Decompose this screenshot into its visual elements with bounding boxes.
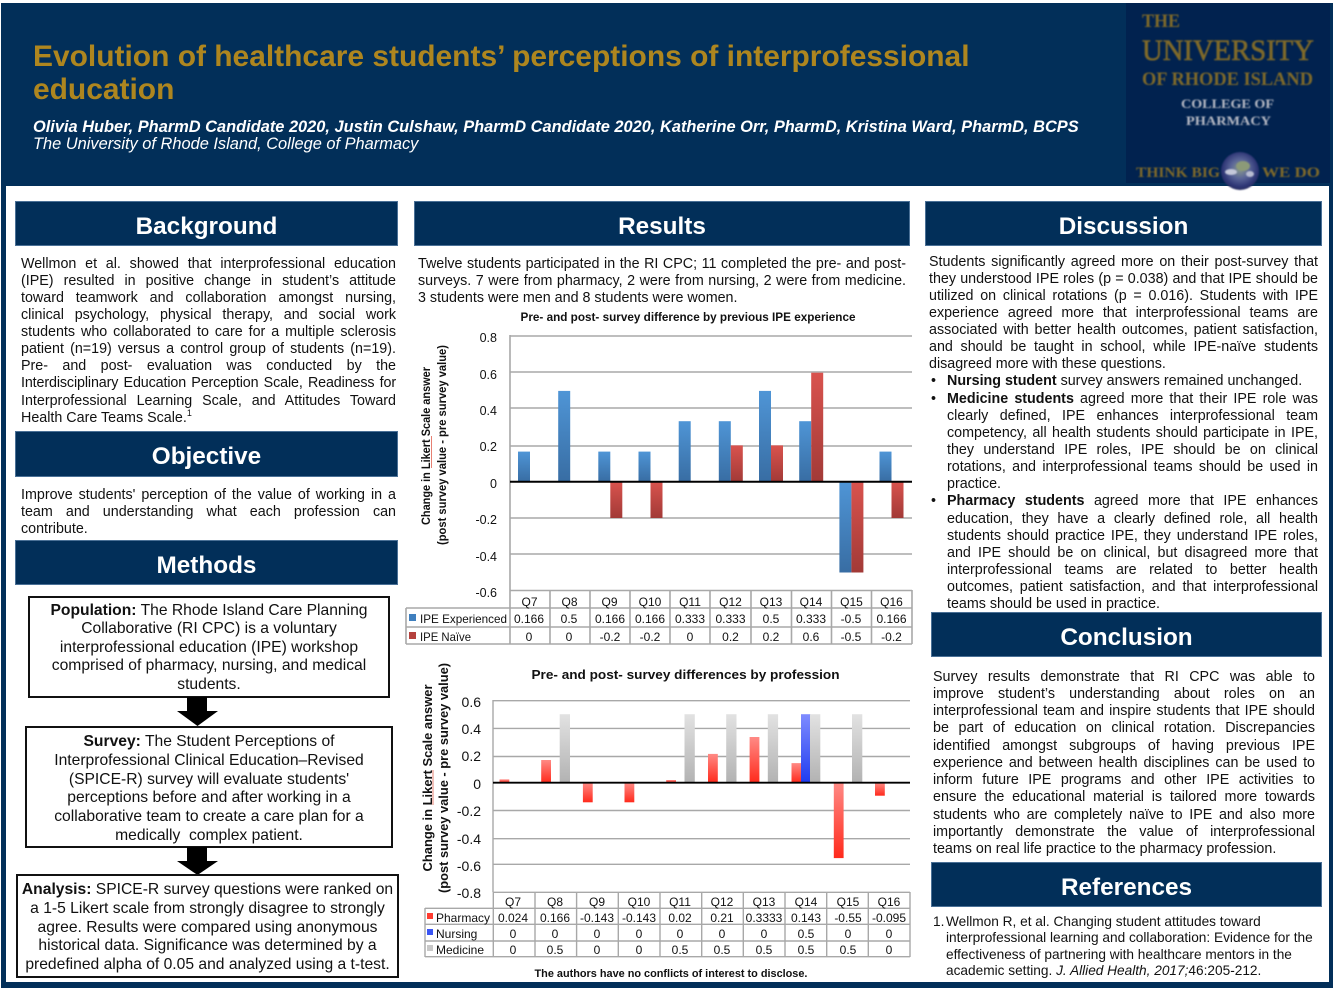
data table: Medicine row: 0.5 <box>714 943 731 957</box>
y axis labels: 0.4 <box>462 721 481 737</box>
university logo: THINK BIG <box>1136 165 1220 181</box>
data table: Nursing row: 0 <box>886 927 893 941</box>
data table: question labels: Q14 <box>800 595 823 609</box>
data table: Pharmacy row: 0.3333 <box>746 911 783 925</box>
text: discussion: • <box>931 493 936 509</box>
chart title: Pre- and post- survey differences by profession <box>532 668 840 682</box>
data table: question labels: Q12 <box>719 595 742 609</box>
data table: IPE Experienced row: 0.5 <box>763 612 780 626</box>
data table: IPE Naive row: 0 <box>566 630 573 644</box>
y axis labels: 0 <box>490 477 497 491</box>
method box: survey: medically complex patient. <box>115 827 303 844</box>
method box: analysis: predefined alpha of 0.05 and analyzed using a t-test. <box>25 956 390 973</box>
text: conclusion: interprofessional team and inspire students that IPE should <box>933 703 1315 719</box>
method box: population: students. <box>177 676 241 693</box>
data table: IPE Naive row: -0.5 <box>841 630 862 644</box>
text: references: interprofessional learning and collaboration: Evidence for the <box>946 930 1313 945</box>
data table: question labels <box>521 595 903 609</box>
data table: IPE Experienced row <box>409 612 907 626</box>
text: objective: team and understanding what each profession can <box>21 504 396 520</box>
y axis labels: -0.8 <box>457 885 481 901</box>
data table: IPE Experienced row: 0.166 <box>595 612 625 626</box>
bars: IPE Naive <box>610 373 904 572</box>
data table: Medicine row: 0.5 <box>756 943 773 957</box>
data table: IPE Naive row: -0.2 <box>640 630 661 644</box>
y axis labels: -0.6 <box>475 586 497 600</box>
method box: population: interprofessional education (IPE) workshop <box>60 639 358 656</box>
data table: IPE Naive row: 0 <box>526 630 533 644</box>
data table: Nursing row: Nursing <box>436 927 477 941</box>
disclosure note: The authors have no conflicts of interest to disclose. <box>535 968 807 980</box>
text: conclusion: improve student’s understanding about roles on an <box>933 686 1315 702</box>
data table: IPE Experienced row: -0.5 <box>841 612 862 626</box>
y axis labels: -0.2 <box>475 513 497 527</box>
y axis labels: 0.6 <box>480 368 497 382</box>
y axis labels: 0.2 <box>480 440 497 454</box>
method box: population: Collaborative (RI CPC) is a voluntary <box>81 620 337 637</box>
text: references: 1. <box>933 914 944 929</box>
data table: IPE Experienced row: 0.333 <box>715 612 746 626</box>
data table: Pharmacy row: 0.024 <box>498 911 528 925</box>
data table: Pharmacy row: -0.143 <box>622 911 656 925</box>
method box: analysis: historical data. Significance was determined by a <box>38 937 377 954</box>
y axis labels: 0.4 <box>480 404 497 418</box>
y axis labels: 0 <box>473 776 481 792</box>
data table: IPE Experienced row: 0.333 <box>796 612 826 626</box>
data table: question labels: Q12 <box>711 895 734 909</box>
data table: question labels: Q13 <box>753 895 776 909</box>
heading: Discussion: Discussion <box>1059 213 1188 240</box>
bars: Nursing <box>801 714 810 783</box>
university logo: PHARMACY <box>1186 113 1272 128</box>
heading: Background: Background <box>136 213 277 240</box>
data table: IPE Naive row: 0.6 <box>803 630 820 644</box>
text: background: students who collaborated to care for a multiple sclerosis <box>21 324 396 340</box>
y axis labels: 0.8 <box>480 331 497 345</box>
heading: Methods: Methods <box>157 552 256 579</box>
data table: IPE Naive row: 0.2 <box>722 630 739 644</box>
text: conclusion: identified amongst subgroups of having previous IPE <box>933 738 1315 754</box>
data table: Medicine row: 0.5 <box>798 943 815 957</box>
data table: Nursing row: 0.5 <box>798 927 815 941</box>
authors and affiliation <box>33 118 1079 153</box>
text: conclusion: students who are completely naïve to IPE and also more <box>933 806 1315 822</box>
data table: IPE Naive row: IPE Naïve <box>420 630 471 644</box>
data table: Nursing row: 0 <box>552 927 559 941</box>
data table: Pharmacy row <box>427 911 906 925</box>
text: conclusion: teams on real life practice to the pharmacy profession. <box>933 841 1276 857</box>
method box: analysis <box>16 874 399 978</box>
text: background: clinical psychology, physical therapy, and social work <box>21 307 396 323</box>
y axis labels <box>475 331 497 600</box>
data table: question labels: Q7 <box>521 595 538 609</box>
text: discussion: disagreed more with these questions. <box>929 356 1166 372</box>
data table: Nursing row: 0 <box>845 927 852 941</box>
authors and affiliation: The University of Rhode Island, College of Pharmacy <box>33 135 418 153</box>
text: results: 3 students were men and 8 students were women. <box>418 290 737 306</box>
data table: question labels: Q8 <box>561 595 578 609</box>
y axis labels <box>457 694 481 901</box>
heading: Objective <box>15 431 398 477</box>
heading: Conclusion: Conclusion <box>1060 624 1193 651</box>
text: discussion: they understood IPE roles (p = 0.038) and that IPE should be <box>929 271 1318 287</box>
text: discussion: education, they have a clearly defined role, all health <box>947 511 1318 527</box>
text: discussion: competency, all health students should participate in IPE, <box>947 425 1318 441</box>
university logo: UNIVERSITY <box>1142 34 1314 67</box>
y axis title: (post survey value - pre survey value) <box>436 663 451 893</box>
text: discussion: they understand IPE roles, IPE should be on clinical <box>947 442 1318 458</box>
heading: References: References <box>1061 874 1192 901</box>
data table: Pharmacy row: -0.095 <box>872 911 906 925</box>
data table: Pharmacy row: 0.166 <box>540 911 570 925</box>
y axis labels: -0.4 <box>475 550 497 564</box>
data table: IPE Experienced row: 0.166 <box>514 612 544 626</box>
data table: Nursing row: 0 <box>677 927 684 941</box>
y axis labels: -0.6 <box>457 858 481 874</box>
text: discussion: and IPE should be on clinical, but disagreed more that <box>947 545 1318 561</box>
text: references: academic setting. J. Allied Health, 2017;46:205-212. <box>946 963 1261 978</box>
data table: question labels: Q9 <box>601 595 618 609</box>
heading: References <box>931 862 1322 907</box>
method box: analysis: Analysis: SPICE-R survey questions were ranked on <box>22 881 393 898</box>
text: discussion <box>929 254 1318 612</box>
title: Evolution of healthcare students’ perceptions of interprofessional <box>33 40 970 73</box>
method box: survey: perceptions before and after working in a <box>67 789 351 806</box>
y axis title: Change in Likert Scale answer <box>420 684 435 872</box>
method box: population: comprised of pharmacy, nursing, and medical <box>52 657 366 674</box>
heading: Results: Results <box>618 213 706 240</box>
authors and affiliation: Olivia Huber, PharmD Candidate 2020, Justin Culshaw, PharmD Candidate 2020, Katherine Orr, PharmD, Kristina Ward, PharmD, BCPS <box>33 118 1079 136</box>
method box: population <box>28 596 390 698</box>
data table: Pharmacy row: -0.55 <box>834 911 862 925</box>
data table: Pharmacy row: 0.02 <box>668 911 692 925</box>
text: discussion: Nursing student survey answers remained unchanged. <box>947 373 1302 389</box>
data table: Medicine row: 0 <box>594 943 601 957</box>
data table: Nursing row: 0 <box>761 927 768 941</box>
data table: Pharmacy row: -0.143 <box>580 911 614 925</box>
method box: survey: Survey: The Student Perceptions of <box>84 733 334 750</box>
text: background: Pre- and post- evaluation was conducted by the <box>21 358 396 374</box>
text: conclusion: be part of education on clinical rotation. Discrepancies <box>933 720 1315 736</box>
text: conclusion: experience and between health disciplines can be used to <box>933 755 1315 771</box>
text: discussion: outcomes, patient satisfaction, and that interprofessional <box>947 579 1318 595</box>
text: discussion: practice. <box>947 476 1001 492</box>
bars: Medicine <box>560 714 862 783</box>
data table: question labels: Q8 <box>547 895 563 909</box>
text: conclusion: importantly demonstrate the value of interprofessional <box>933 824 1315 840</box>
data table: Nursing row <box>427 927 893 941</box>
method box: survey: collaborative team to create a care plan for a <box>54 808 364 825</box>
y axis labels: 0.6 <box>462 694 481 710</box>
y axis title: (post survey value - pre survey value) <box>435 345 449 545</box>
text: discussion: and should be taught in school, while IPE-naïve students <box>929 339 1318 355</box>
text: discussion: associated with better health outcomes, patient satisfaction, <box>929 322 1318 338</box>
data table: IPE Naive row: 0.2 <box>763 630 780 644</box>
text: discussion: students should practice IPE, they understand IPE roles, <box>947 528 1318 544</box>
data table: question labels: Q11 <box>679 595 701 609</box>
data table: Medicine row: 0.5 <box>840 943 857 957</box>
text: discussion: Students significantly agreed more on their post-survey that <box>929 254 1318 270</box>
data table: Pharmacy row: Pharmacy <box>436 911 490 925</box>
text: background: Wellmon et al. showed that interprofessional education <box>21 256 396 272</box>
data table: IPE Naive row <box>409 630 902 644</box>
text: discussion: clearly defined, IPE enhances interprofessional team <box>947 408 1318 424</box>
data table grid <box>425 892 910 957</box>
heading: Methods <box>15 540 398 585</box>
data table: IPE Naive row: -0.2 <box>600 630 621 644</box>
text: conclusion: Survey results demonstrate that RI CPC was able to <box>933 668 1315 684</box>
text: discussion: interprofessional teams are related to better health <box>947 562 1318 578</box>
text: references <box>933 914 1313 978</box>
text: background: toward teamwork and collaboration amongst nursing, <box>21 290 396 306</box>
text: results: surveys. 7 were from pharmacy, 2 were from nursing, 2 were from medicine. <box>418 273 906 289</box>
text: discussion: Pharmacy students agreed more that IPE enhances <box>947 493 1318 509</box>
data table: Medicine row: 0.5 <box>547 943 564 957</box>
method box: analysis: agree. Results were compared using anonymous <box>38 918 377 936</box>
data table: question labels: Q10 <box>639 595 662 609</box>
method box: survey: Interprofessional Clinical Education–Revised <box>54 752 364 769</box>
text: conclusion <box>933 668 1315 857</box>
y axis labels: 0.2 <box>462 748 481 764</box>
title: education <box>33 73 174 106</box>
data table: Medicine row <box>427 943 893 957</box>
y axis title <box>420 663 451 893</box>
university logo <box>1126 3 1330 191</box>
text: conclusion: ensure the educational material is tailored more towards <box>933 789 1315 805</box>
data table: IPE Experienced row: 0.166 <box>635 612 665 626</box>
text: background: (IPE) resulted in positive change in student’s attitude <box>21 273 396 289</box>
data table: Medicine row: 0 <box>636 943 643 957</box>
data table: Nursing row: 0 <box>594 927 601 941</box>
university logo: OF RHODE ISLAND <box>1142 69 1313 90</box>
data table: IPE Experienced row: IPE Experienced <box>420 612 507 626</box>
text: discussion: utilized on clinical rotations (p = 0.016). Students with IPE <box>929 288 1318 304</box>
data table: question labels: Q10 <box>628 895 651 909</box>
data table: IPE Naive row: -0.2 <box>881 630 902 644</box>
text: results: Twelve students participated in the RI CPC; 11 completed the pre- and post- <box>418 256 906 272</box>
method box: analysis: a 1-5 Likert scale from strongly disagree to strongly <box>30 900 385 917</box>
data table: question labels: Q15 <box>837 895 860 909</box>
text: discussion: Medicine students agreed more that their IPE role was <box>947 391 1318 407</box>
method box: population: Population: The Rhode Island Care Planning <box>50 602 368 618</box>
data table: question labels: Q13 <box>760 595 783 609</box>
university logo: WE DO <box>1262 165 1320 181</box>
data table: question labels: Q7 <box>505 895 521 909</box>
title <box>33 40 970 106</box>
data table: question labels: Q14 <box>795 895 818 909</box>
heading: Background <box>15 201 398 246</box>
data table: IPE Experienced row: 0.166 <box>876 612 907 626</box>
text: objective <box>21 486 396 537</box>
data table: question labels: Q11 <box>669 895 691 909</box>
heading: Objective: Objective <box>152 443 261 470</box>
bars: Pharmacy <box>500 737 885 858</box>
text: discussion: rotations, and interprofessional teams should be used in <box>947 459 1318 475</box>
y axis labels: -0.4 <box>457 831 481 847</box>
data table: Nursing row: 0 <box>510 927 517 941</box>
text: objective: contribute. <box>21 521 88 537</box>
data table: IPE Experienced row: 0.5 <box>561 612 578 626</box>
gridlines <box>493 700 910 892</box>
text: references: Wellmon R, et al. Changing student attitudes toward <box>946 914 1261 929</box>
heading: Results <box>414 201 910 246</box>
text: background <box>21 256 396 426</box>
text: discussion: • <box>931 373 936 389</box>
y axis title: Change in Likert Scale answer <box>419 367 433 525</box>
text: objective: Improve students' perception of the value of working in a <box>21 486 396 502</box>
data table: Nursing row: 0 <box>719 927 726 941</box>
text: references: effectiveness of partnering with healthcare mentors in the <box>946 947 1292 962</box>
heading: Conclusion <box>931 612 1322 657</box>
chart title: Pre- and post- survey difference by previous IPE experience <box>520 310 856 324</box>
data table: question labels: Q16 <box>880 595 903 609</box>
data table: Pharmacy row: 0.21 <box>710 911 734 925</box>
data table: Medicine row: Medicine <box>436 943 484 957</box>
method box: survey <box>25 726 393 848</box>
data table: question labels: Q9 <box>589 895 605 909</box>
data table: Nursing row: 0 <box>636 927 643 941</box>
data table: Pharmacy row: 0.143 <box>791 911 821 925</box>
data table grid <box>406 590 912 644</box>
university logo: THE <box>1142 11 1180 32</box>
data table: question labels: Q16 <box>878 895 901 909</box>
y axis labels: -0.2 <box>457 803 481 819</box>
data table: IPE Experienced row: 0.333 <box>675 612 705 626</box>
text: background: patient (n=19) versus a control group of students (n=19). <box>21 341 396 357</box>
text: discussion: experience agreed more that interprofessional teams are <box>929 305 1318 321</box>
data table: Medicine row: 0.5 <box>672 943 689 957</box>
method box: survey: (SPICE-R) survey will evaluate students' <box>69 770 349 788</box>
data table: Medicine row: 0 <box>510 943 517 957</box>
bars: IPE Experienced <box>518 391 892 572</box>
data table: question labels: Q15 <box>840 595 863 609</box>
y axis title <box>419 345 449 545</box>
heading: Discussion <box>925 201 1322 246</box>
data table: question labels <box>505 895 901 909</box>
text: background: Health Care Teams Scale.1 <box>21 408 192 426</box>
text: background: Interprofessional Learning Scale, and Attitudes Toward <box>21 393 396 409</box>
text: conclusion: inform future IPE programs and other IPE activities to <box>933 772 1315 788</box>
university logo: COLLEGE OF <box>1181 96 1274 111</box>
data table: Medicine row: 0 <box>886 943 893 957</box>
data table: IPE Naive row: 0 <box>687 630 694 644</box>
text: results <box>418 256 906 306</box>
text: background: Interdisciplinary Education Perception Scale, Readiness for <box>21 375 396 391</box>
text: discussion: • <box>931 391 936 407</box>
gridlines <box>510 335 912 590</box>
text: discussion: teams should be used in practice. <box>947 596 1160 612</box>
